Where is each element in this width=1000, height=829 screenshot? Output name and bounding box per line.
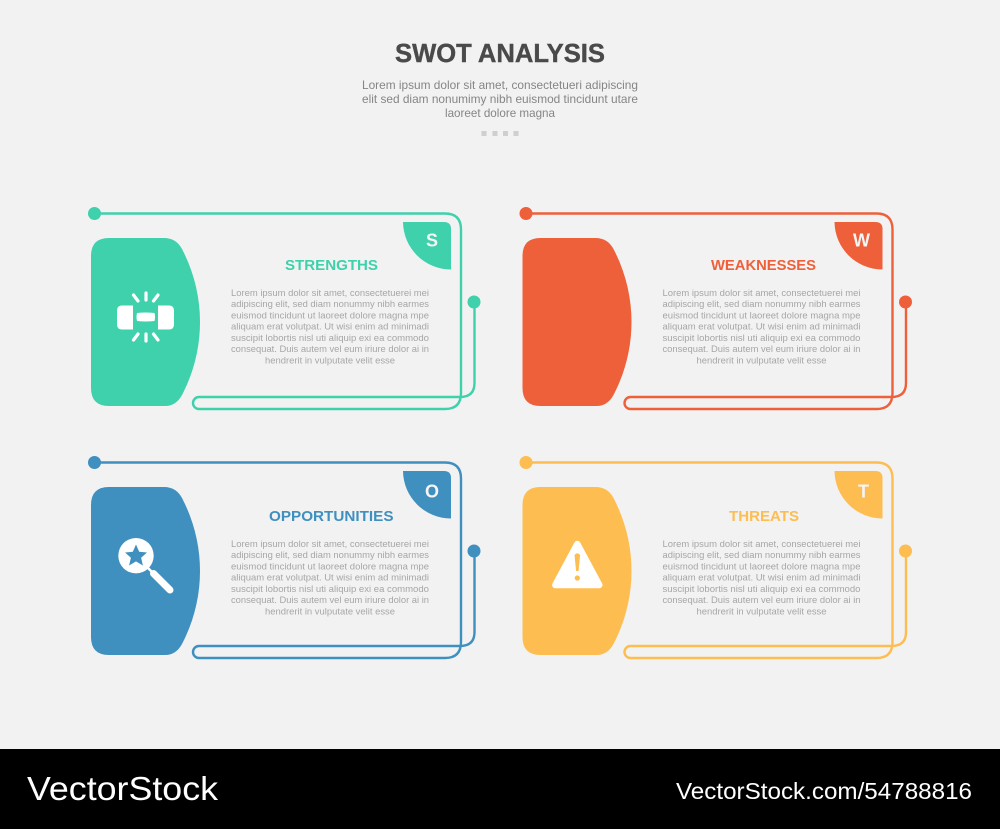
corner tab: [403, 471, 451, 518]
start dot: [520, 456, 532, 469]
body text: aliquam erat volutpat. Ut wisi enim ad minimadi: [662, 572, 860, 583]
end dot: [899, 296, 912, 308]
body text: adipiscing elit, sed diam nonummy nibh earmes: [662, 298, 861, 309]
body text: aliquam erat volutpat. Ut wisi enim ad minimadi: [231, 321, 429, 332]
body text: euismod tincidunt ut laoreet dolore magna mpe: [231, 560, 429, 572]
corner tab: [403, 222, 451, 270]
heading: OPPORTUNITIES: [269, 508, 394, 525]
body text: Lorem ipsum dolor sit amet, consectetuerei mei: [662, 538, 860, 549]
body text: hendrerit in vulputate velit esse: [265, 605, 395, 616]
heading: STRENGTHS: [285, 257, 378, 274]
subtitle text block: Lorem ipsum dolor sit amet, consectetueri adipiscing: [362, 78, 638, 92]
body text: hendrerit in vulputate velit esse: [696, 605, 826, 616]
corner letter: S: [426, 230, 438, 250]
body text: euismod tincidunt ut laoreet dolore magna mpe: [231, 310, 429, 320]
body text: adipiscing elit, sed diam nonummy nibh earmes: [662, 549, 861, 560]
body text: consequat. Duis autem vel eum iriure dolor ai in: [662, 594, 860, 605]
panel: threats: [520, 456, 912, 658]
body text: [662, 287, 861, 365]
body text: suscipit lobortis nisl uti aliquip exi ea commodo: [662, 332, 860, 343]
body text: [231, 287, 429, 365]
title: SWOT ANALYSIS: [395, 38, 605, 68]
icon: broken dumbbell: [117, 293, 174, 341]
title divider dots: [482, 131, 518, 136]
watermark brand: VectorStock: [27, 770, 219, 807]
body text: adipiscing elit, sed diam nonummy nibh earmes: [231, 298, 429, 309]
panel: opportunities: [88, 456, 480, 658]
watermark footer bar: [0, 749, 1000, 829]
body text: suscipit lobortis nisl uti aliquip exi ea commodo: [231, 332, 429, 343]
body text: euismod tincidunt ut laoreet dolore magna mpe: [662, 560, 860, 572]
body text: Lorem ipsum dolor sit amet, consectetuerei mei: [231, 538, 429, 549]
body text: [662, 538, 861, 616]
subtitle text block: laoreet dolore magna: [445, 106, 555, 120]
body text: [231, 538, 429, 616]
icon shape: [91, 487, 200, 655]
subtitle text block: [362, 78, 638, 120]
start dot: [88, 456, 101, 469]
body text: Lorem ipsum dolor sit amet, consectetuerei mei: [231, 287, 429, 298]
body text: consequat. Duis autem vel eum iriure dolor ai in: [231, 594, 429, 605]
start dot: [520, 207, 532, 220]
body text: hendrerit in vulputate velit esse: [265, 354, 395, 365]
heading: WEAKNESSES: [711, 257, 816, 274]
frame line: [94, 214, 474, 409]
corner letter: W: [853, 230, 870, 250]
corner letter: O: [425, 482, 439, 502]
panel: strengths: [88, 207, 480, 409]
body text: euismod tincidunt ut laoreet dolore magna mpe: [662, 310, 860, 320]
body text: consequat. Duis autem vel eum iriure dolor ai in: [662, 343, 860, 354]
icon: magnifier with star: [118, 538, 170, 590]
body text: consequat. Duis autem vel eum iriure dolor ai in: [231, 343, 429, 354]
body text: suscipit lobortis nisl uti aliquip exi ea commodo: [231, 583, 429, 594]
body text: adipiscing elit, sed diam nonummy nibh earmes: [231, 549, 429, 560]
frame line: [94, 462, 474, 658]
frame line: [526, 462, 906, 658]
corner tab: [834, 471, 882, 518]
end dot: [899, 544, 912, 558]
body text: Lorem ipsum dolor sit amet, consectetuerei mei: [662, 287, 860, 298]
end dot: [468, 544, 480, 558]
panel: weaknesses: [520, 207, 912, 409]
icon shape: [522, 238, 632, 406]
frame line: [526, 214, 906, 409]
heading: THREATS: [729, 508, 799, 525]
body text: aliquam erat volutpat. Ut wisi enim ad minimadi: [231, 572, 429, 583]
body text: hendrerit in vulputate velit esse: [696, 354, 826, 365]
end dot: [468, 296, 480, 308]
icon: warning triangle: [555, 544, 599, 585]
corner tab: [834, 222, 882, 270]
body text: suscipit lobortis nisl uti aliquip exi ea commodo: [662, 583, 860, 594]
icon shape: [91, 238, 200, 406]
subtitle text block: elit sed diam nonumimy nibh euismod tincidunt utare: [362, 92, 638, 106]
body text: aliquam erat volutpat. Ut wisi enim ad minimadi: [662, 321, 860, 332]
corner letter: T: [858, 482, 869, 502]
start dot: [88, 207, 101, 220]
icon shape: [522, 487, 632, 655]
watermark url: VectorStock.com/54788816: [676, 778, 972, 804]
